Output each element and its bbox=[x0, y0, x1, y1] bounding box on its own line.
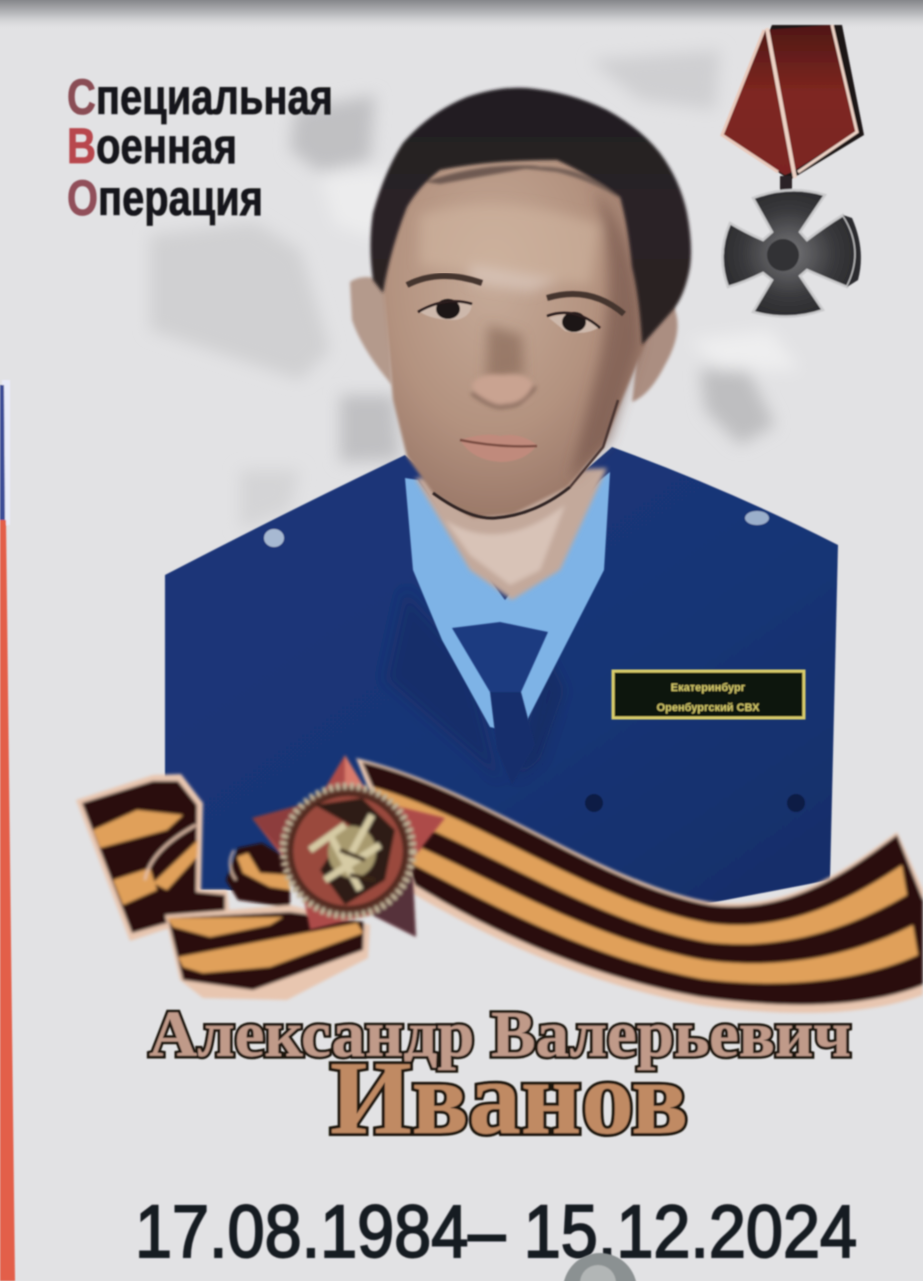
st george ribbon bbox=[76, 758, 923, 1013]
main ribbon band bbox=[356, 758, 923, 1013]
name badge: Оренбургский СВХ bbox=[657, 702, 760, 714]
face shading bbox=[420, 190, 640, 480]
right eye bbox=[547, 312, 600, 333]
eyes and brows bbox=[407, 276, 624, 333]
neck bbox=[415, 468, 607, 600]
life dates: 17.08.1984– 15.12.2024 bbox=[135, 1190, 857, 1273]
tie bbox=[452, 622, 548, 785]
name heading bbox=[149, 998, 851, 1156]
lower ribbon fold bbox=[165, 905, 370, 1000]
eyebrows bbox=[407, 276, 624, 314]
left ribbon flap bbox=[76, 774, 230, 941]
medallion bbox=[283, 786, 413, 916]
name badge bbox=[613, 671, 804, 718]
title: special military operation bbox=[67, 69, 333, 226]
name badge: Екатеринбург bbox=[671, 682, 746, 694]
line: Операция: Операция bbox=[67, 170, 263, 226]
mounting screw bbox=[563, 1253, 637, 1281]
icon: order of courage medal bbox=[722, 25, 864, 317]
first name and patronymic: Александр Валерьевич bbox=[149, 998, 851, 1071]
icon: order of the patriotic war star bbox=[252, 755, 445, 937]
ears bbox=[350, 277, 678, 402]
left eye bbox=[418, 299, 472, 320]
medal cross bbox=[722, 190, 861, 317]
curl near star bbox=[226, 843, 290, 908]
chin line bbox=[433, 400, 618, 518]
shirt collar bbox=[405, 472, 610, 734]
red star bbox=[252, 755, 445, 937]
head bbox=[383, 130, 645, 518]
nose bbox=[472, 374, 535, 407]
portrait bbox=[165, 88, 838, 905]
flag strip on left edge bbox=[0, 380, 15, 1281]
medal ribbon bbox=[722, 25, 864, 190]
line: Военная: Военная bbox=[67, 118, 237, 174]
surname: Иванов bbox=[330, 1039, 688, 1156]
line: Специальная: Специальная bbox=[67, 69, 333, 125]
jacket bbox=[165, 447, 838, 905]
hair bbox=[370, 88, 691, 345]
mouth bbox=[460, 435, 537, 462]
